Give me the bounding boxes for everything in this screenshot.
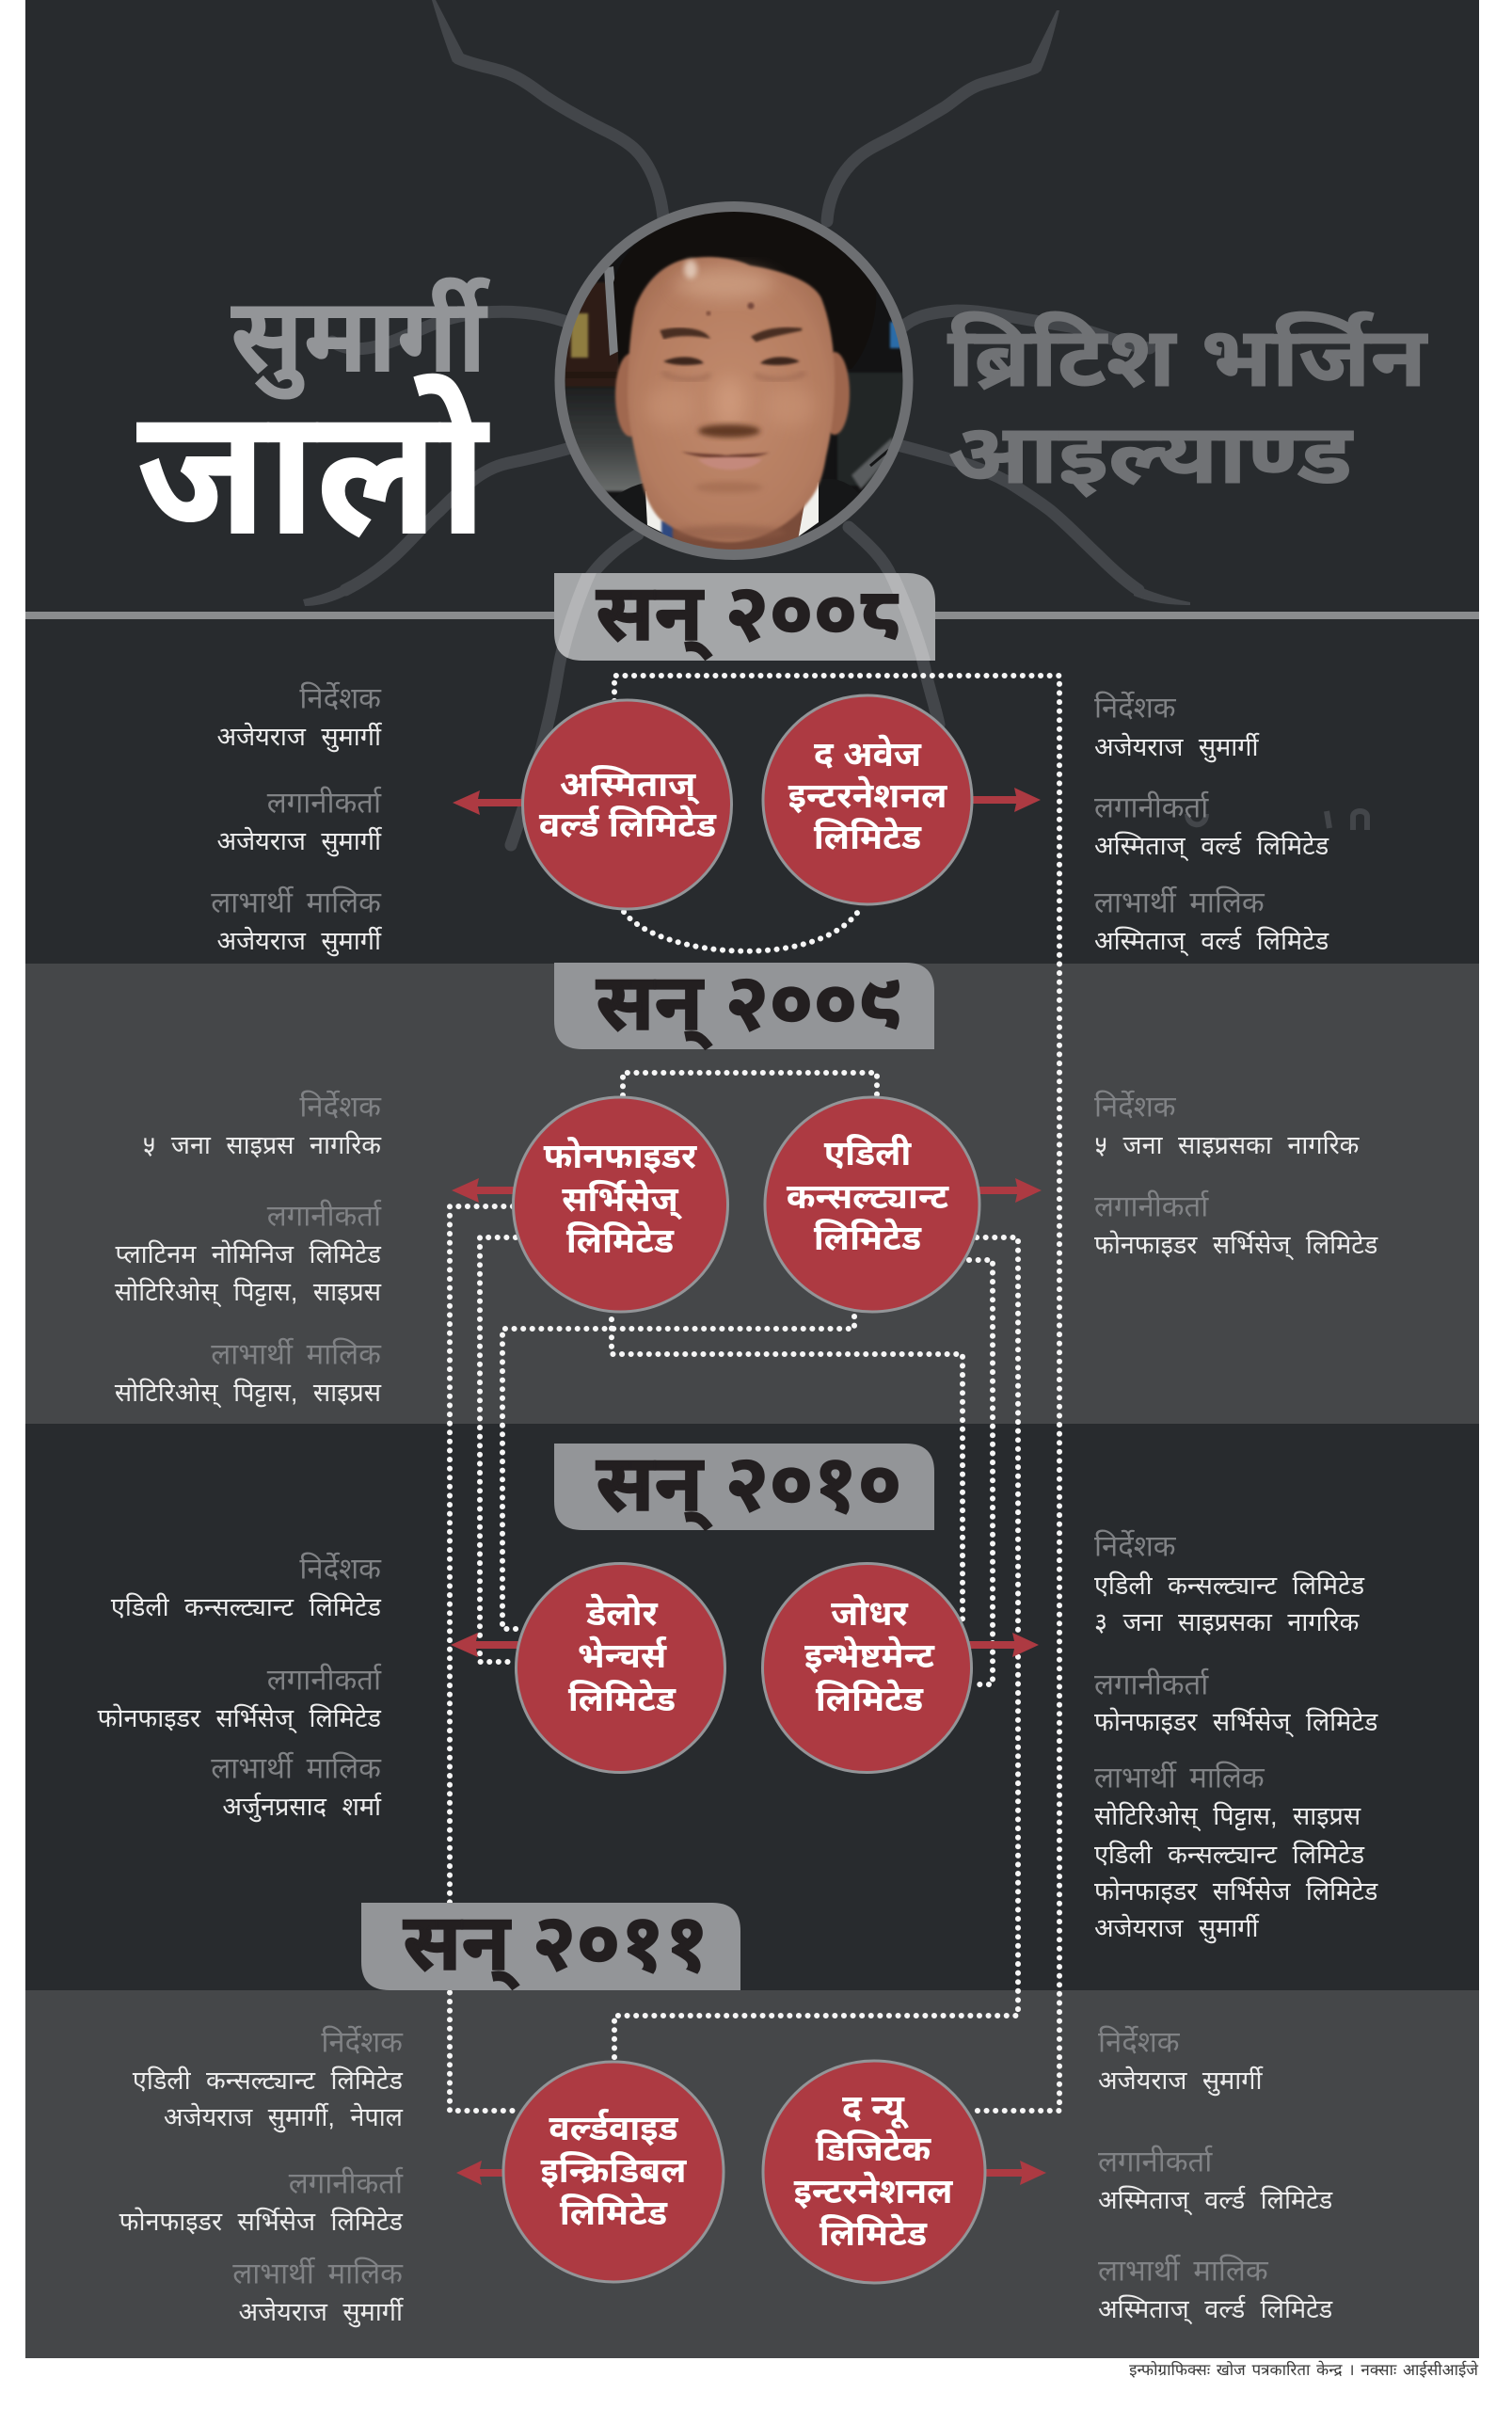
- jacket: [621, 480, 849, 493]
- company circle: Jodhar: इन्भेष्टमेन्ट: [804, 1635, 935, 1675]
- company circle: Asmitaj: [523, 700, 732, 909]
- arrow: Asmitaj left: [453, 790, 522, 815]
- info block: Phonefinder: [115, 1090, 382, 1409]
- gray strip: [604, 266, 618, 356]
- company circle: Asmitaj: अस्मिताज्: [560, 765, 700, 805]
- info block: New Digitek: लगानीकर्ता: [1098, 2146, 1213, 2178]
- info block: Worldwide: फोनफाइडर सर्भिसेज लिमिटेड: [119, 2207, 404, 2236]
- year tag: 2011: सन् २०११: [403, 1898, 709, 1989]
- info block: Avej: [1094, 691, 1329, 957]
- arrow: New Digitek right: [986, 2161, 1046, 2185]
- info block: Avej: लाभार्थी मालिक: [1094, 886, 1265, 918]
- company circle: Phonefinder: [514, 1097, 728, 1312]
- company circle: Adili: कन्सल्ट्यान्ट: [787, 1177, 949, 1216]
- info block: Jodhar: सोटिरिओस् पिट्टास, साइप्रस: [1094, 1802, 1361, 1832]
- year tag: 2008: सन् २००८: [596, 568, 902, 660]
- info block: Worldwide: निर्देशक: [321, 2025, 404, 2059]
- company circle: Phonefinder: लिमिटेड: [566, 1220, 675, 1260]
- info block: Asmitaj: अजेयराज सुमार्गी: [217, 826, 383, 857]
- info block: Adili: [1094, 1090, 1378, 1261]
- subtitle: British Virgin Islands: आइल्याण्ड: [947, 407, 1354, 501]
- info block: Delor: निर्देशक: [299, 1553, 382, 1585]
- subtitle: British Virgin Islands: [947, 311, 1428, 501]
- info block: Adili: ५ जना साइप्रसका नागरिक: [1094, 1131, 1361, 1159]
- info block: Worldwide: अजेयराज सुमार्गी: [239, 2297, 405, 2328]
- info block: Phonefinder: निर्देशक: [299, 1090, 382, 1124]
- company circle: Avej: द अवेज: [814, 734, 922, 774]
- portrait ring: [560, 207, 908, 555]
- info block: Phonefinder: लाभार्थी मालिक: [211, 1338, 382, 1370]
- info block: Delor: एडिली कन्सल्ट्यान्ट लिमिटेड: [111, 1592, 382, 1621]
- info block: Jodhar: निर्देशक: [1094, 1530, 1177, 1562]
- arrows: [451, 788, 1046, 2185]
- collar: [645, 491, 664, 533]
- company circle: Asmitaj: वर्ल्ड लिमिटेड: [539, 805, 717, 844]
- company circle: Worldwide: [503, 2062, 724, 2282]
- mouth: [681, 452, 770, 459]
- info block: Worldwide: [119, 2025, 405, 2328]
- info block: Jodhar: अजेयराज सुमार्गी: [1094, 1913, 1260, 1944]
- info block: New Digitek: लाभार्थी मालिक: [1098, 2255, 1269, 2287]
- info block: Worldwide: लगानीकर्ता: [289, 2166, 404, 2200]
- info block: Jodhar: एडिली कन्सल्ट्यान्ट लिमिटेड: [1094, 1571, 1365, 1600]
- band: 2009: [25, 964, 1479, 1424]
- info block: New Digitek: अस्मिताज् वर्ल्ड लिमिटेड: [1098, 2294, 1333, 2325]
- company circle: Avej: इन्टरनेशनल: [788, 775, 947, 815]
- arrow: Jodhar right: [969, 1633, 1039, 1657]
- info block: Avej: निर्देशक: [1094, 691, 1177, 725]
- portrait: [554, 201, 913, 565]
- cheeks: [651, 393, 683, 421]
- info block: Phonefinder: सोटिरिओस् पिट्टास, साइप्रस: [115, 1278, 382, 1308]
- info block: Jodhar: फोनफाइडर सर्भिसेज् लिमिटेड: [1094, 1707, 1378, 1738]
- info block: Phonefinder: लगानीकर्ता: [267, 1199, 382, 1233]
- company circle: Delor: भेन्चर्स: [578, 1635, 667, 1675]
- info block: Phonefinder: प्लाटिनम नोमिनिज लिमिटेड: [116, 1239, 382, 1268]
- arrow: Worldwide left: [456, 2161, 502, 2185]
- horizontal rule: [25, 612, 1479, 619]
- company circle: Delor: डेलोर: [585, 1593, 658, 1633]
- company circle: Jodhar: जोधर: [831, 1594, 909, 1633]
- connector: Adili to Jodhar: [969, 1260, 993, 1684]
- info block: Delor: लगानीकर्ता: [267, 1664, 382, 1696]
- info block: Avej: अस्मिताज् वर्ल्ड लिमिटेड: [1094, 926, 1329, 957]
- info block: Worldwide: अजेयराज सुमार्गी, नेपाल: [164, 2102, 404, 2133]
- company circle: Worldwide: वर्ल्डवाइड: [549, 2108, 679, 2147]
- connector: Adili to Delor: [502, 1316, 854, 1629]
- ears: [613, 352, 633, 439]
- info block: Jodhar: लाभार्थी मालिक: [1094, 1762, 1265, 1794]
- dotted connector lines: [450, 676, 1059, 2111]
- info block: Adili: लगानीकर्ता: [1094, 1189, 1209, 1223]
- arrow: Phonefinder left: [452, 1178, 516, 1203]
- connector: 2009 top: [623, 1073, 877, 1095]
- info block: Jodhar: ३ जना साइप्रसका नागरिक: [1094, 1608, 1361, 1636]
- info block: Asmitaj: लाभार्थी मालिक: [211, 886, 382, 918]
- face: [628, 257, 835, 542]
- forehead highlights: [676, 269, 773, 299]
- connector: 2009 left to Delor lower: [480, 1237, 516, 1662]
- sofa left: [565, 388, 644, 493]
- info block: Delor: अर्जुनप्रसाद शर्मा: [222, 1792, 382, 1823]
- info block: Asmitaj: अजेयराज सुमार्गी: [217, 722, 383, 753]
- info block: Delor: लाभार्थी मालिक: [211, 1752, 382, 1784]
- ghost marks under Avej info: [1187, 811, 1367, 830]
- info block: Jodhar: फोनफाइडर सर्भिसेज लिमिटेड: [1094, 1876, 1378, 1906]
- title: [136, 277, 491, 572]
- info block: Avej: लगानीकर्ता: [1094, 790, 1209, 824]
- company circle: Avej: [763, 695, 972, 904]
- connector: Phonefinder to Jodhar: [612, 1319, 963, 1621]
- spider web background legs: [303, 0, 1367, 845]
- info block: Asmitaj: निर्देशक: [299, 681, 382, 715]
- year tag: 2010: सन् २०१०: [596, 1439, 902, 1530]
- nose: [715, 382, 743, 422]
- company circle: Worldwide: इन्क्रिडिबल: [540, 2151, 687, 2190]
- info block: New Digitek: निर्देशक: [1098, 2025, 1181, 2059]
- info block: Jodhar: लगानीकर्ता: [1094, 1667, 1209, 1701]
- company circle: Phonefinder: फोनफाइडर: [544, 1137, 697, 1175]
- company circle: New Digitek: द न्यू: [842, 2088, 909, 2129]
- company circle: Worldwide: लिमिटेड: [560, 2193, 668, 2232]
- title line: Jalo: जालो: [136, 373, 490, 572]
- company circle: Phonefinder: सर्भिसेज्: [562, 1179, 683, 1220]
- company circle: Adili: [765, 1097, 979, 1312]
- company circle: New Digitek: इन्टरनेशनल: [794, 2171, 953, 2210]
- eyebrows: [661, 329, 708, 338]
- eyes: [663, 357, 704, 365]
- arrow: Avej right: [972, 788, 1041, 812]
- arrow: Adili right: [979, 1178, 1042, 1203]
- company circle: Adili: लिमिटेड: [814, 1218, 922, 1257]
- title line: Sumargi: सुमार्गी: [231, 277, 491, 401]
- company circle: Delor: [516, 1564, 724, 1773]
- connector: Adili to Worldwide: [614, 1237, 1018, 2058]
- company circle: New Digitek: [763, 2061, 985, 2283]
- info block: Avej: अस्मिताज् वर्ल्ड लिमिटेड: [1094, 831, 1329, 862]
- subtitle: British Virgin Islands: ब्रिटिश भर्जिन: [947, 311, 1428, 404]
- sofa right: [837, 373, 908, 486]
- info block: New Digitek: अजेयराज सुमार्गी: [1098, 2066, 1264, 2097]
- company circle: New Digitek: डिजिटेक: [816, 2129, 932, 2168]
- info block: Adili: फोनफाइडर सर्भिसेज् लिमिटेड: [1094, 1230, 1378, 1261]
- neck: [671, 503, 804, 550]
- info block: New Digitek: [1098, 2025, 1333, 2325]
- info block: Phonefinder: ५ जना साइप्रस नागरिक: [142, 1131, 382, 1159]
- company circle: Jodhar: लिमिटेड: [816, 1679, 924, 1718]
- company circle: Jodhar: [762, 1564, 971, 1773]
- info block: Avej: अजेयराज सुमार्गी: [1094, 732, 1260, 763]
- credit line: इन्फोग्राफिक्सः खोज पत्रकारिता केन्द्र । नक्साः आईसीआईजे: [1129, 2359, 1478, 2379]
- year tag: 2009: सन् २००९: [596, 958, 902, 1049]
- info block: New Digitek: अस्मिताज् वर्ल्ड लिमिटेड: [1098, 2185, 1333, 2216]
- eye bags: [662, 373, 710, 379]
- hair: [613, 279, 621, 366]
- photo contents: [565, 212, 903, 550]
- info block: Jodhar: एडिली कन्सल्ट्यान्ट लिमिटेड: [1094, 1840, 1365, 1869]
- info block: Delor: फोनफाइडर सर्भिसेज् लिमिटेड: [98, 1703, 382, 1734]
- info block: Adili: निर्देशक: [1094, 1090, 1177, 1124]
- connector: 2008 to 2011 right: [614, 676, 1059, 2111]
- info block: Asmitaj: [211, 681, 383, 957]
- company circle: Adili: एडिली: [824, 1134, 912, 1173]
- company circle: New Digitek: लिमिटेड: [820, 2213, 928, 2253]
- info block: Jodhar: [1094, 1530, 1378, 1944]
- bookshelf: [565, 282, 619, 388]
- info block: Asmitaj: लगानीकर्ता: [267, 787, 382, 819]
- info block: Asmitaj: अजेयराज सुमार्गी: [217, 926, 383, 957]
- info block: Worldwide: लाभार्थी मालिक: [232, 2257, 404, 2290]
- company circle: Avej: लिमिटेड: [814, 817, 922, 856]
- connector: 2009 left outer to 2011: [450, 1206, 520, 2111]
- arrow: Delor left: [451, 1633, 518, 1657]
- company circle: Delor: लिमिटेड: [568, 1679, 676, 1718]
- band: 2011: [25, 1990, 1479, 2358]
- connector: 2008 curve: [624, 909, 860, 951]
- info block: Delor: [98, 1553, 382, 1823]
- info block: Worldwide: एडिली कन्सल्ट्यान्ट लिमिटेड: [133, 2066, 404, 2095]
- info block: Phonefinder: सोटिरिओस् पिट्टास, साइप्रस: [115, 1379, 382, 1409]
